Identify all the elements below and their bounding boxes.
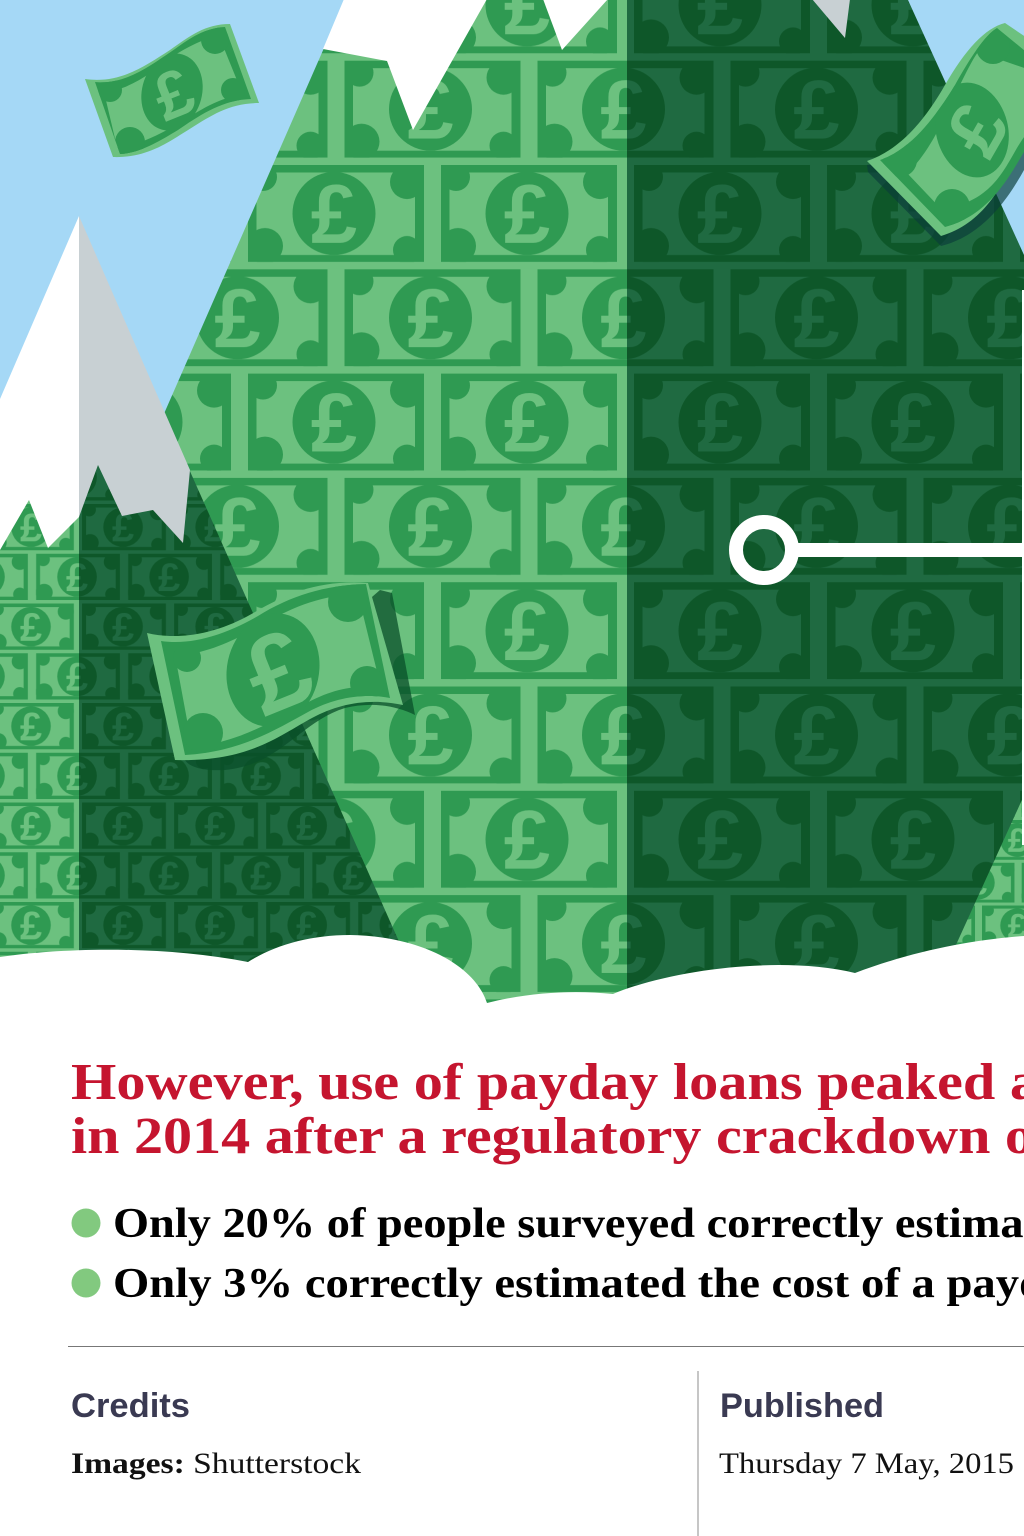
published block: Thursday 7 May, 2015 (719, 1447, 1014, 1480)
credits block: Credits (71, 1387, 190, 1425)
flying banknote top right: £ (928, 89, 1024, 170)
large mountain right foothill (930, 791, 1024, 1002)
small mountain lit face (0, 440, 79, 1000)
small mountain white snow (0, 216, 79, 550)
published block: Published (720, 1387, 884, 1425)
flying banknote top left: £ (142, 53, 205, 135)
large money mountain (100, 0, 1024, 1012)
small mountain grey snow (79, 216, 190, 543)
callout marker ring and connector line (736, 290, 1024, 845)
headline (71, 1054, 1024, 1165)
credits block (71, 1387, 361, 1480)
flying banknote shadow lower left (185, 590, 415, 770)
bullet two: Only 3% correctly estimated the cost of a payd (113, 1261, 1024, 1307)
small money mountain (0, 216, 425, 1000)
flying banknote lower left (147, 582, 403, 760)
large mountain shaded face (627, 0, 1024, 1012)
flying banknote lower left: £ (227, 604, 328, 739)
headline: However, use of payday loans peaked a (71, 1054, 1024, 1111)
credits block: Images: Shutterstock (71, 1447, 361, 1480)
bullet one: Only 20% of people surveyed correctly estimat (113, 1201, 1024, 1247)
small mountain shaded face (79, 460, 425, 1000)
flying banknote top left (85, 24, 259, 157)
flying banknote shadow top right (867, 140, 1024, 246)
large mountain lit face (100, 0, 627, 1012)
flying banknote top right (867, 23, 1024, 236)
published block (719, 1387, 1014, 1480)
snow drifts (0, 935, 1024, 1040)
sky (0, 0, 1024, 1020)
large mountain snow caps (323, 0, 850, 130)
headline: in 2014 after a regulatory crackdown o (71, 1108, 1024, 1165)
bullet list (72, 1201, 1024, 1307)
